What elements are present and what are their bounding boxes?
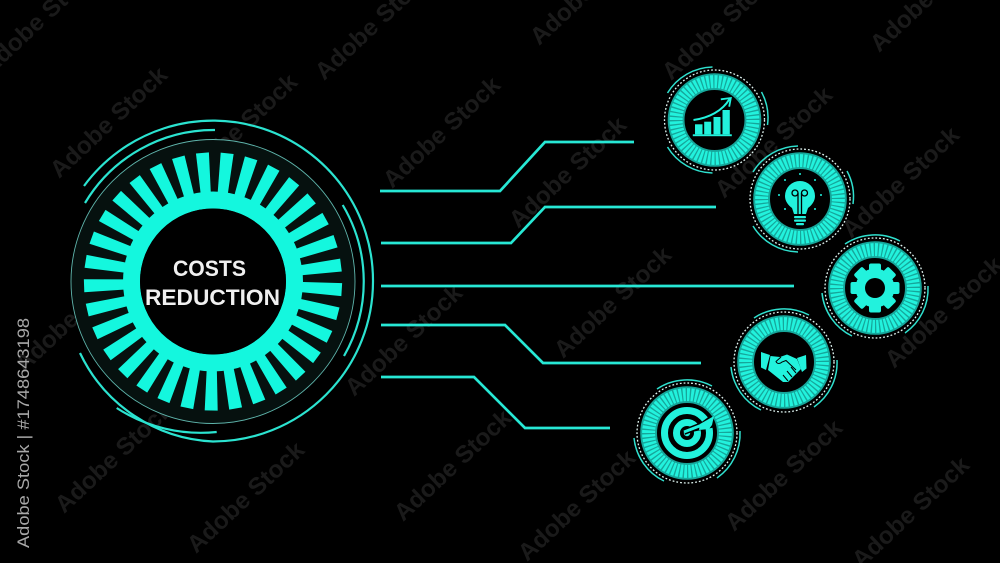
stock watermarks: Adobe Stock bbox=[50, 396, 178, 519]
node: target bbox=[634, 380, 740, 483]
hub title bbox=[145, 256, 280, 310]
stock watermarks: Adobe Stock bbox=[549, 241, 677, 364]
icon: gear bbox=[850, 264, 900, 312]
stock watermarks: Adobe Stock bbox=[45, 61, 173, 184]
hub title: COSTS bbox=[173, 256, 246, 281]
connector: to handshake icon bbox=[381, 325, 701, 363]
stock watermarks: Adobe Stock bbox=[378, 71, 506, 194]
hub radial bars bbox=[84, 152, 342, 411]
stock watermarks: Adobe Stock bbox=[720, 414, 848, 537]
stock watermarks: Adobe Stock bbox=[10, 255, 138, 378]
stock watermarks: Adobe Stock bbox=[710, 81, 838, 204]
icon: target with arrow bbox=[664, 410, 716, 456]
hub outer arcs bbox=[80, 121, 373, 442]
node: handshake bbox=[731, 309, 837, 412]
stock watermarks: Adobe Stock bbox=[513, 444, 641, 563]
connector: to target icon bbox=[381, 377, 610, 428]
hub title: REDUCTION bbox=[145, 285, 280, 310]
main hub circle bbox=[71, 121, 373, 442]
icon: handshake bbox=[761, 352, 806, 382]
node: growth chart bbox=[664, 67, 768, 173]
stock watermarks: Adobe Stock bbox=[389, 404, 517, 527]
icon: light bulb bbox=[778, 173, 822, 225]
image id, vertical text: Adobe Stock | #1748643198 bbox=[14, 318, 33, 548]
node: gear bbox=[822, 235, 928, 338]
node: light bulb bbox=[750, 146, 853, 252]
connector lines bbox=[380, 142, 794, 428]
icon: bar chart with arrow bbox=[693, 98, 732, 136]
stock watermarks: Adobe Stock bbox=[504, 111, 632, 234]
stock watermarks: Adobe Stock bbox=[182, 436, 310, 559]
stock watermarks: Adobe Stock bbox=[837, 121, 965, 244]
stock watermarks: Adobe Stock bbox=[340, 279, 468, 402]
stock watermarks: Adobe Stock bbox=[175, 68, 303, 191]
connector: to gear icon bbox=[381, 285, 794, 287]
connector: to bulb icon bbox=[381, 207, 716, 243]
connector: to chart icon bbox=[380, 142, 634, 191]
